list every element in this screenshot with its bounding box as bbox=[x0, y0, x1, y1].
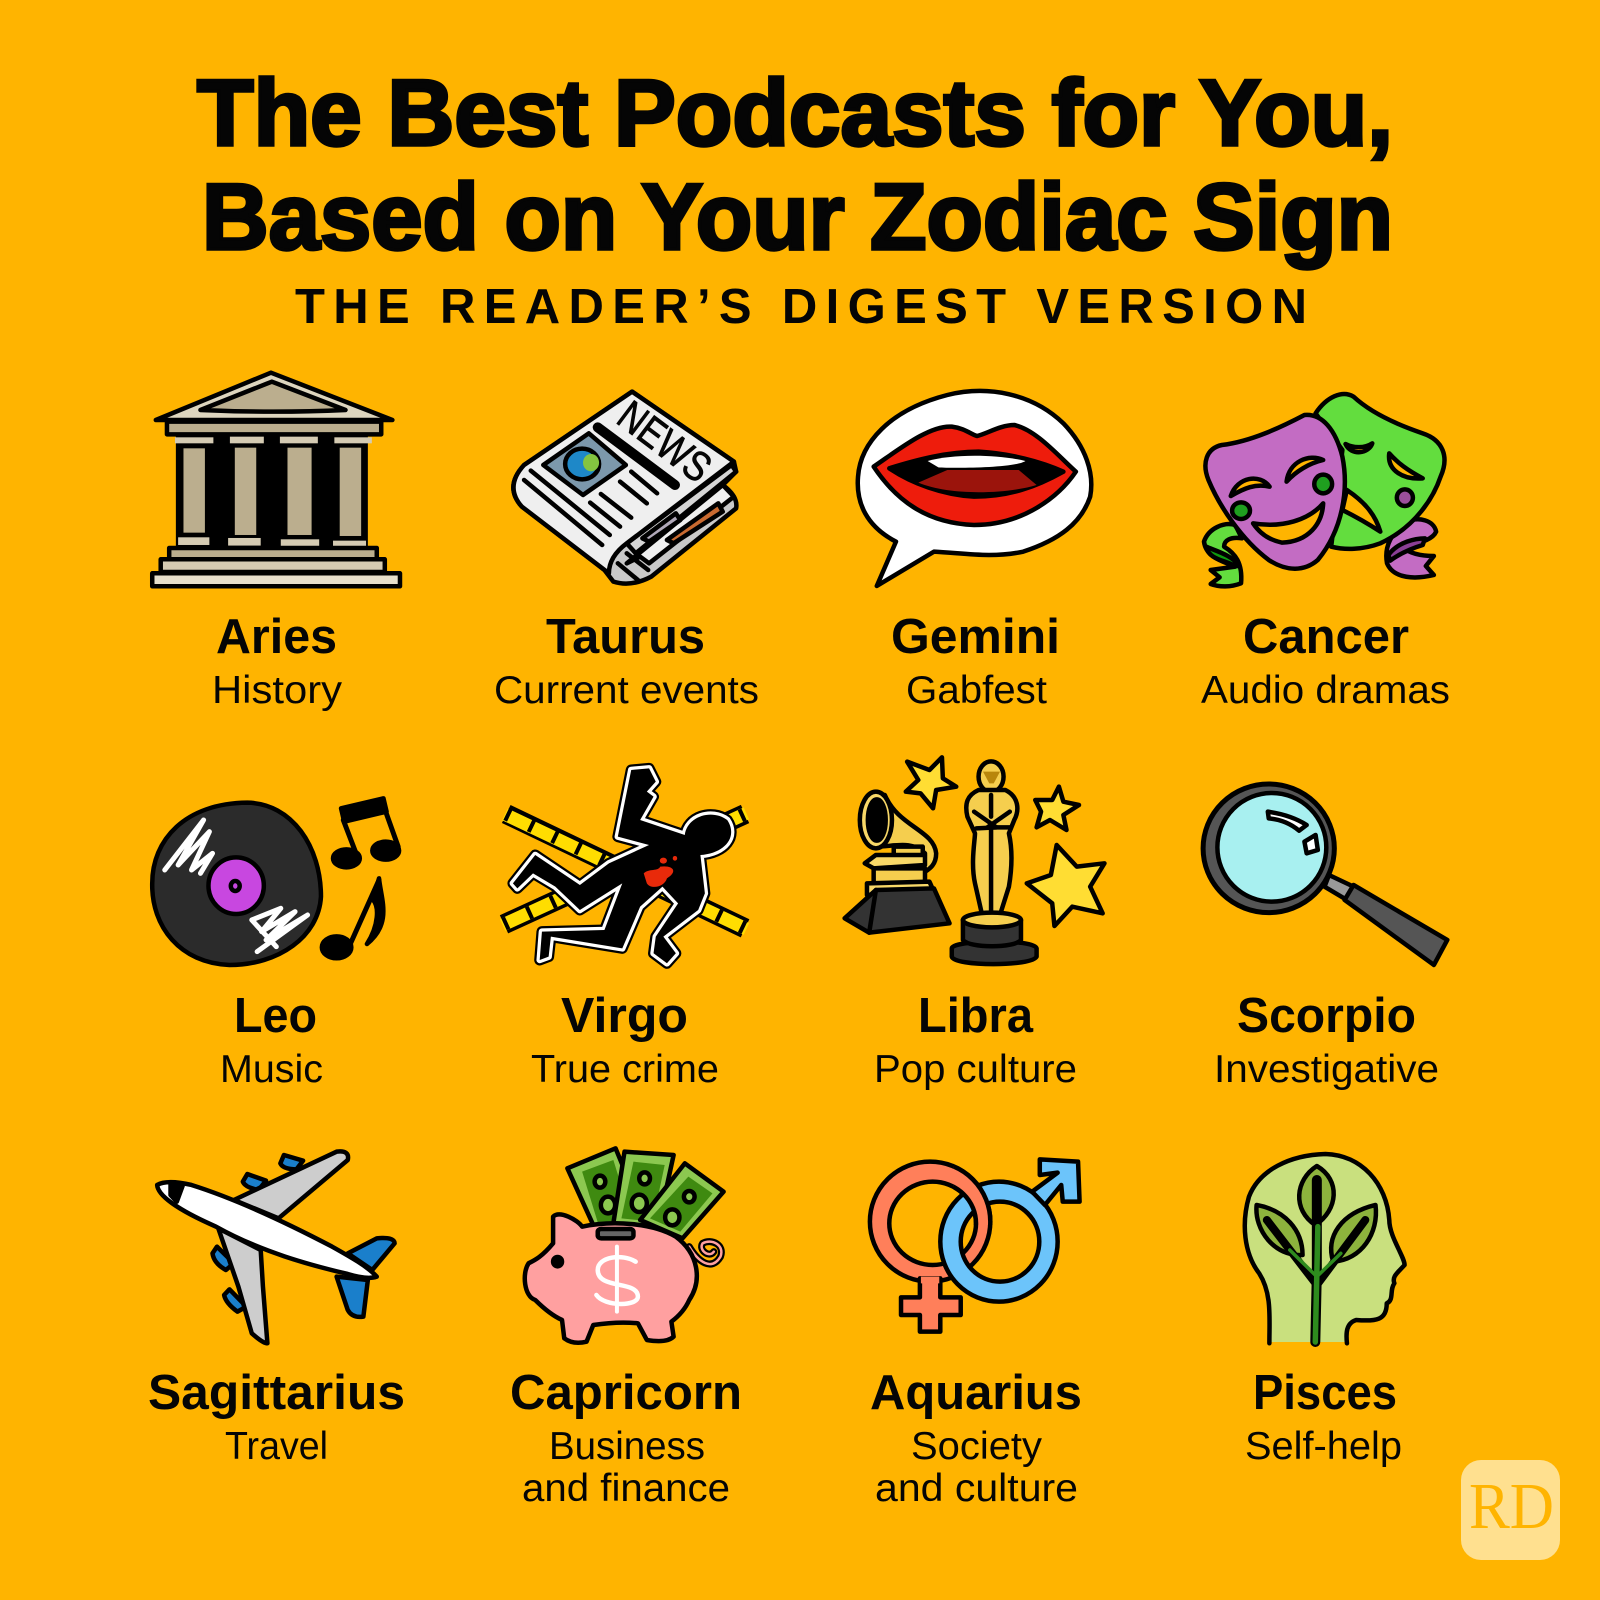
name: Sagittarius bbox=[148, 1366, 405, 1420]
icon: gramophone, statuette and stars bbox=[845, 757, 1104, 964]
description: Investigative bbox=[1214, 1048, 1439, 1091]
panel: Pisces bbox=[1245, 1154, 1405, 1468]
panel: Taurus bbox=[494, 391, 759, 712]
description line two: and finance bbox=[522, 1467, 730, 1510]
name: Pisces bbox=[1253, 1366, 1397, 1420]
icon: newspaper: NEWS bbox=[609, 391, 720, 491]
panel: Gemini bbox=[858, 391, 1091, 712]
subtitle: THE READER’S DIGEST VERSION bbox=[295, 280, 1307, 334]
icon: magnifying glass bbox=[1203, 784, 1447, 965]
logo: RD badge: RD bbox=[1469, 1470, 1554, 1543]
description: Gabfest bbox=[906, 669, 1047, 712]
name: Virgo bbox=[561, 989, 688, 1043]
icon: airplane bbox=[157, 1151, 395, 1343]
description: Audio dramas bbox=[1201, 669, 1450, 712]
name: Aquarius bbox=[870, 1366, 1082, 1420]
icon: crime scene outline and tape bbox=[503, 768, 746, 963]
description: History bbox=[212, 669, 343, 712]
icon: newspaper bbox=[513, 391, 736, 584]
name: Leo bbox=[234, 989, 317, 1043]
logo: RD badge bbox=[1461, 1460, 1560, 1560]
name: Libra bbox=[918, 989, 1034, 1043]
name: Capricorn bbox=[510, 1366, 742, 1420]
panel: Sagittarius bbox=[148, 1151, 405, 1468]
icon: theater masks bbox=[1204, 394, 1444, 586]
description: Music bbox=[220, 1048, 323, 1091]
description line two: and culture bbox=[875, 1467, 1078, 1510]
icon: interlocked gender symbols bbox=[870, 1159, 1080, 1332]
panel: Virgo bbox=[503, 768, 746, 1091]
panel: Cancer bbox=[1201, 394, 1450, 712]
name: Aries bbox=[216, 610, 337, 664]
description: Travel bbox=[225, 1425, 328, 1468]
title bbox=[197, 60, 1393, 269]
icon: temple bbox=[152, 373, 400, 586]
icon: speech bubble with lips bbox=[858, 391, 1091, 586]
icon: vinyl record and notes bbox=[152, 798, 399, 965]
title: The Best Podcasts for You, bbox=[197, 60, 1393, 165]
name: Scorpio bbox=[1237, 989, 1416, 1043]
panel: Scorpio bbox=[1203, 784, 1447, 1091]
name: Gemini bbox=[891, 610, 1060, 664]
panel: Aries bbox=[152, 373, 400, 712]
icon: piggy bank with cash bbox=[525, 1148, 724, 1343]
description: Self-help bbox=[1245, 1425, 1402, 1468]
description: Society bbox=[911, 1425, 1042, 1468]
description: Business bbox=[549, 1425, 705, 1468]
icon: head with plant bbox=[1245, 1154, 1405, 1343]
description: True crime bbox=[531, 1048, 719, 1091]
name: Cancer bbox=[1243, 610, 1409, 664]
description: Current events bbox=[494, 669, 759, 712]
panel: Leo bbox=[152, 798, 399, 1091]
panel: Aquarius bbox=[870, 1159, 1082, 1510]
panel: Libra bbox=[845, 757, 1104, 1091]
description: Pop culture bbox=[874, 1048, 1077, 1091]
name: Taurus bbox=[546, 610, 705, 664]
title: Based on Your Zodiac Sign bbox=[202, 164, 1393, 269]
panel: Capricorn bbox=[510, 1148, 742, 1510]
